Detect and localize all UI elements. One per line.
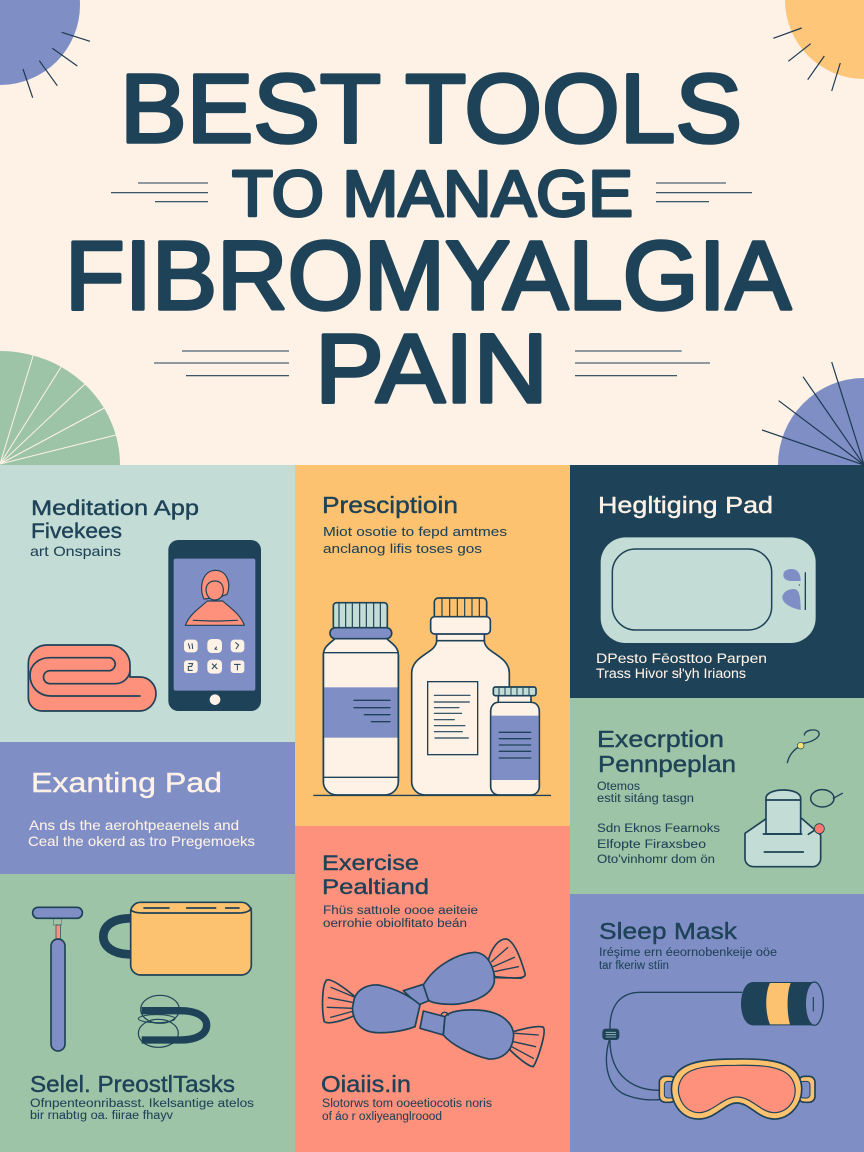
description line one: Miot osotie to fepd amtmes — [323, 524, 508, 539]
icon: resistance band bow — [323, 939, 544, 1067]
description line one: Ofnpenteonribasst. Ikelsantige atelos — [30, 1098, 254, 1110]
description line one: Fhüs sattıole oooe aeiteie — [323, 905, 478, 917]
description line two: Ceal the okerd as tro Pregemoeks — [28, 833, 255, 849]
description line one: Slotorws tom ooeetiocotis noris — [322, 1098, 492, 1110]
icon: heat belt bag — [103, 902, 251, 975]
caption: art Onspains — [30, 543, 121, 559]
description line two: bir rnabtıg oa. fiirae fhayv — [30, 1110, 173, 1122]
panel: exercise — [295, 826, 570, 1152]
note text block — [597, 781, 694, 805]
decorative corner: purple sunburst top left — [0, 0, 90, 98]
note text block: estit sitáng tasgn — [597, 793, 694, 805]
description line two: tar fkeriw stíin — [599, 960, 669, 972]
icon: rolled blanket — [28, 645, 156, 711]
description line one: Iréşime ern éeornobenkeije oöe — [599, 947, 777, 959]
panel: self treatment tools — [0, 874, 295, 1152]
panel: meditation app — [0, 465, 295, 742]
heading line two: Fivekees — [31, 519, 122, 543]
panel: exercise plan — [570, 698, 864, 894]
panel: prescription — [295, 465, 570, 826]
description line two: anclanog lifis toses gos — [323, 541, 483, 556]
icon: small bottle — [491, 687, 539, 795]
icon: heating pad — [601, 537, 816, 643]
icon: battery canister — [741, 982, 823, 1025]
decorative corner: purple fan right — [762, 362, 864, 552]
heading: heating pad: Hegltiging Pad — [598, 492, 773, 518]
icon: wide bottle with paper label — [412, 598, 509, 795]
panel: sleep mask — [570, 894, 864, 1152]
heading: self practice tasks: Selel. PreostlTasks — [30, 1071, 235, 1097]
description line one: Ans ds the aerohtpeaenels and — [29, 817, 239, 833]
title line: fibromyalgia: FIBROMYALGIA — [65, 221, 791, 330]
description line two: Trass Hivor sł'yh Iriaons — [596, 666, 746, 681]
title — [65, 54, 791, 423]
heading line two: Pennpeplan — [598, 751, 736, 777]
title accent lines — [111, 183, 752, 376]
note text block: Otemos — [597, 781, 640, 793]
icon: sleep mask — [659, 1059, 815, 1119]
list text block: Elfopte Firaxsbeo — [597, 839, 706, 851]
title line: pain: PAIN — [315, 314, 548, 423]
decorative corner: yellow sunburst top right — [773, 0, 864, 91]
icon: kit with doodles — [745, 730, 842, 867]
heading: exanting pad: Exanting Pad — [31, 767, 222, 798]
shelf line — [313, 794, 551, 796]
icon: resistance strap — [138, 995, 207, 1047]
list text block — [597, 823, 720, 866]
heading: execrption: Execrption — [597, 726, 724, 752]
description line two: of áo r oxliyeanglroood — [322, 1111, 442, 1123]
icon: cable and control box — [602, 992, 742, 1100]
icon: phone with meditation app — [168, 540, 261, 711]
description line one: DPesto Fēosttoo Parpen — [596, 651, 767, 666]
heading line two: Pealtiand — [322, 875, 429, 899]
heading: oiaiis.in: Oiaiis.in — [321, 1071, 411, 1097]
panel: heating pad — [570, 465, 864, 698]
heading: prescription: Presciptioin — [322, 492, 458, 518]
heading: meditation app: Meditation App — [31, 496, 199, 520]
title line: to manage: TO MANAGE — [232, 157, 633, 230]
list text block: Sdn Eknos Fearnoks — [597, 823, 720, 835]
list text block: Oto'vinhomr dom ön — [597, 854, 715, 866]
decorative corner: green fan left — [0, 351, 130, 590]
description line two: oerrohie obiolfitato beán — [323, 918, 467, 930]
panel: exanting pad — [0, 742, 295, 874]
icon: massage mallet — [33, 907, 82, 1051]
icon: large bottle with purple label — [323, 603, 398, 795]
heading: exercise: Exercise — [322, 851, 419, 875]
heading: sleep mask: Sleep Mask — [599, 918, 737, 944]
title line: best tools: BEST TOOLS — [120, 54, 742, 163]
